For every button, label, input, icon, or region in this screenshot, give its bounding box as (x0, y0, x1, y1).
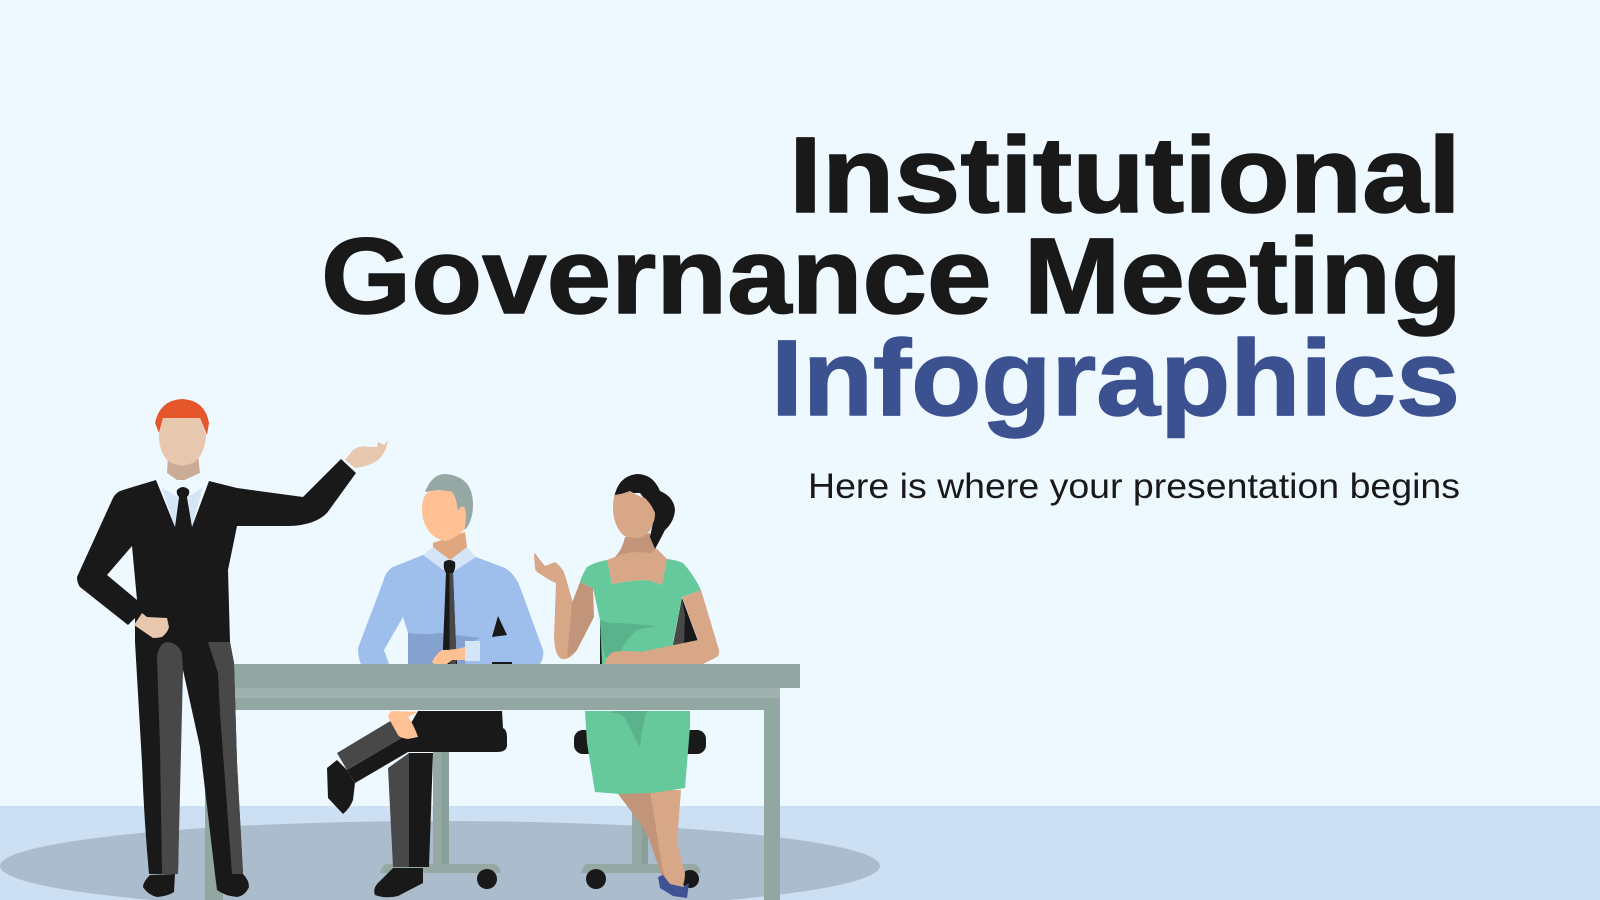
seated man (327, 474, 543, 897)
woman: skirt (585, 711, 690, 794)
seated man's chair (380, 750, 501, 889)
woman: upper arm (567, 582, 594, 658)
subtitle: Here is where your presentation begins (808, 467, 1460, 506)
woman's chair (574, 598, 706, 889)
woman: neck (615, 533, 655, 557)
seated man: shoes (327, 760, 355, 814)
woman: shoes (658, 875, 689, 898)
standing man: hand on hip (134, 613, 169, 638)
seated man: hand (432, 647, 465, 664)
title line: Governance Meeting: Governance Meeting (321, 215, 1462, 336)
standing man: jacket (77, 459, 356, 642)
woman: dress bodice (580, 559, 701, 664)
seated man: neck (433, 532, 467, 562)
woman: raised forearm and hand (534, 553, 577, 659)
seated man: hand on knee (388, 711, 418, 739)
woman: face (613, 491, 655, 538)
seated man: standing leg and crossed leg (388, 753, 409, 867)
standing man: shoes (143, 874, 175, 897)
floor shadow (0, 821, 880, 900)
woman: legs (615, 790, 668, 884)
title (321, 114, 1462, 438)
seated woman (534, 474, 719, 898)
standing man: raised hand (345, 440, 388, 468)
woman: chest (607, 545, 667, 585)
woman: right arm (605, 590, 719, 664)
seated man: tie (443, 560, 457, 664)
standing man: neck (167, 455, 200, 480)
title line: Infographics: Infographics (771, 317, 1460, 438)
seated man: hair (425, 474, 473, 530)
seated man: face (422, 490, 466, 541)
seated man: cuff (465, 641, 480, 661)
woman: hair (614, 474, 675, 549)
standing man (77, 399, 388, 897)
standing man: tie (175, 487, 192, 527)
standing man: shirt collar (156, 473, 209, 527)
seated man: collar (423, 547, 476, 572)
title line: Institutional: Institutional (789, 114, 1461, 235)
standing man: face (159, 418, 206, 466)
floor (0, 806, 1600, 900)
standing man: trousers (135, 642, 243, 874)
standing man: hair (155, 399, 209, 435)
table (205, 664, 800, 900)
seated man: shirt (358, 555, 543, 664)
